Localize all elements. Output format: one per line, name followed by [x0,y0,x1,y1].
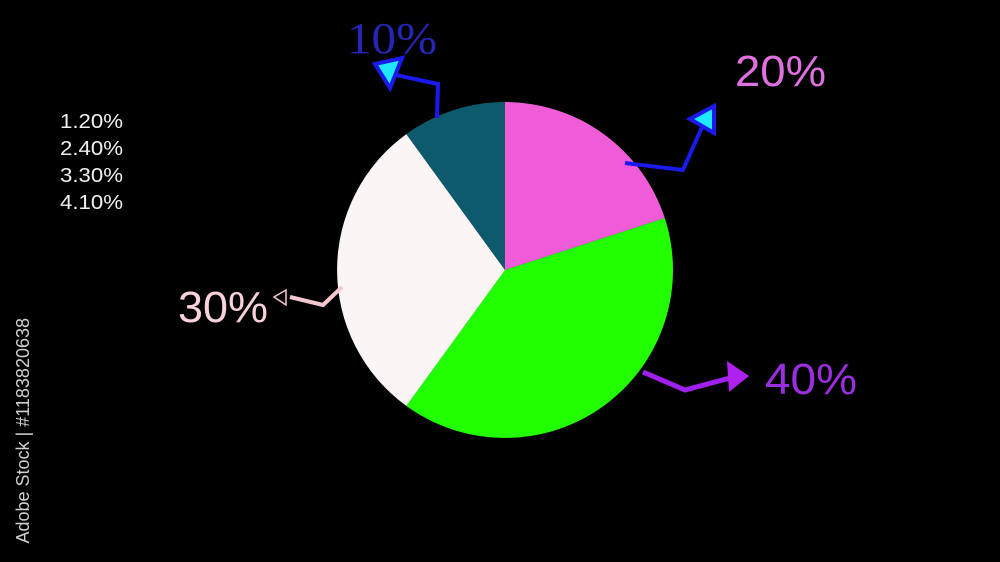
text block: percentage list: 2.40% [60,138,123,160]
slice: 30% white [337,134,505,406]
arrow: 10% [375,58,438,118]
arrow: 40% [643,361,749,392]
text block: percentage list [60,111,123,214]
arrow: 30% [274,287,342,305]
slice: 10% teal [406,102,505,270]
label: 30%: 30% [178,283,268,332]
watermark id text: Adobe Stock | #1183820638 [13,318,33,544]
label: 10%: 10% [347,14,437,63]
pie chart [337,102,673,438]
slice: 40% green [406,218,673,438]
arrow: 20% [625,106,714,170]
label: 20%: 20% [735,47,826,96]
text block: percentage list: 4.10% [60,192,123,214]
label: 40%: 40% [765,355,857,404]
text block: percentage list: 1.20% [60,111,123,133]
slice: 20% pink [505,102,665,270]
text block: percentage list: 3.30% [60,165,123,187]
